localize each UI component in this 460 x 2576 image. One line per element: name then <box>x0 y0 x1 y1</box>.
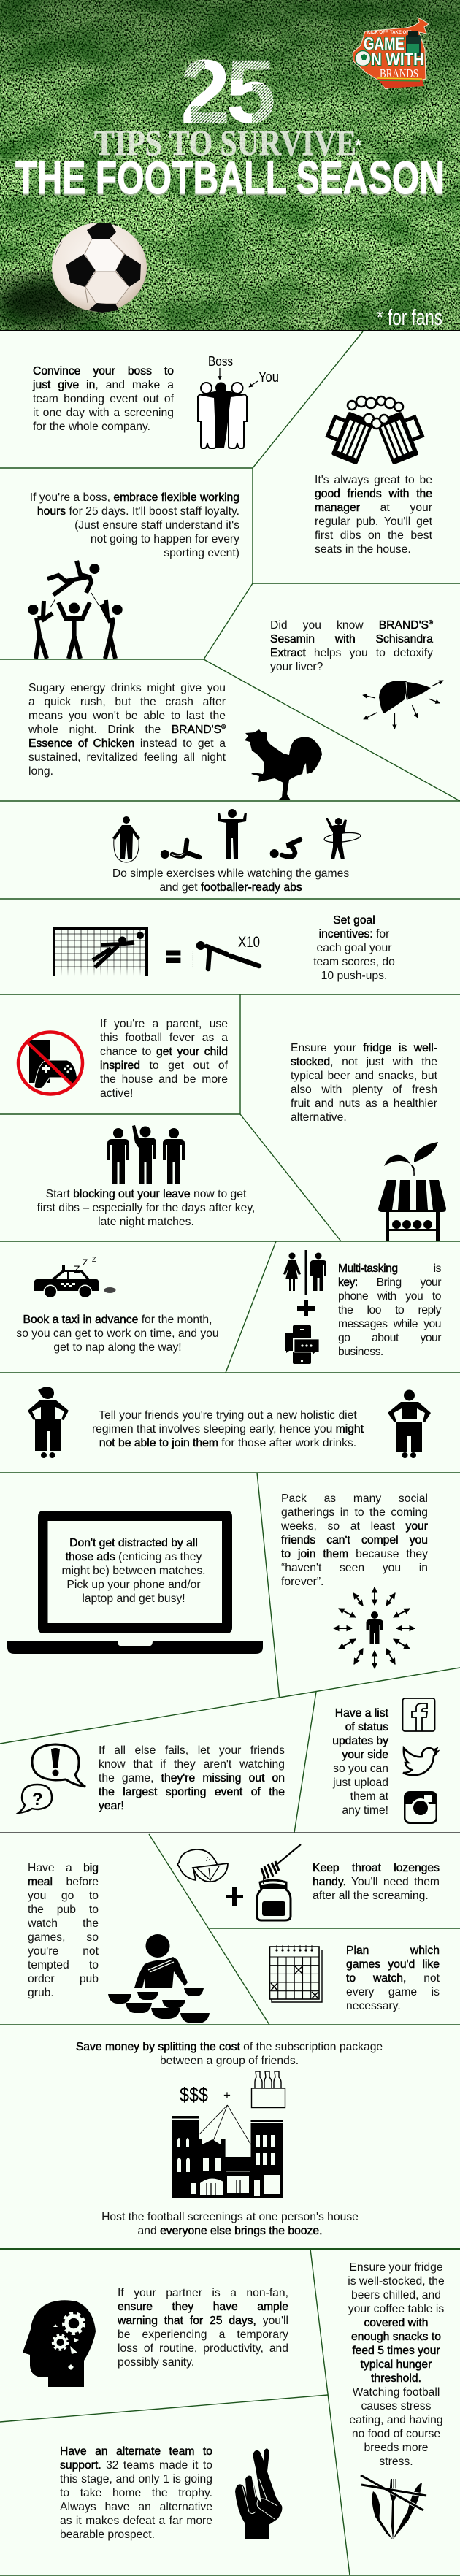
tip: book a taxi: get to nap along the way! <box>53 1341 182 1354</box>
tip: big meal: watch the <box>28 1917 99 1930</box>
tip: ignore ads: those ads (enticing as they <box>66 1551 202 1563</box>
tip: status updates: so you can <box>333 1763 388 1775</box>
tip: essence of chicken: sustained, revitalized feeling all night <box>28 751 226 764</box>
logo: game on with brands: KICK OFF. TAKE OFF. <box>367 31 413 35</box>
tip: throat lozenges: after all the screaming. <box>313 1890 429 1902</box>
tip: snacks on coffee table: typical hunger <box>361 2358 432 2371</box>
tip: goal incentives: incentives: for <box>319 928 389 940</box>
tip: warn your partner <box>117 2287 288 2369</box>
icon: boss and you figures <box>198 354 279 448</box>
tip: big meal <box>28 1862 99 1999</box>
tip: simple exercises: Do simple exercises while watching the games <box>112 867 349 880</box>
tip: well-stocked fridge: Ensure your fridge is well- <box>291 1042 437 1054</box>
tip: simple exercises <box>112 867 349 894</box>
tip: alternate team: support. 32 teams made it to <box>60 2459 212 2472</box>
tip: social gatherings: to join them because they <box>281 1548 428 1560</box>
tip: plan games <box>346 1944 440 2012</box>
logo: game on with brands: BRANDS <box>380 66 418 80</box>
tip: host screenings: Host the football screenings at one person's house <box>101 2211 359 2223</box>
tip: ignore ads <box>61 1537 206 1605</box>
tip: inspire your child: chance to get your child <box>100 1046 228 1058</box>
tip: convince your boss: for the whole company. <box>33 421 150 433</box>
tip: essence of chicken: a quick rush, but the crash after <box>28 696 226 708</box>
tips to survive: TIPS TO SURVIVE <box>94 122 356 163</box>
tip: goal incentives: each goal your <box>317 942 391 954</box>
tip: plan games: games you'd like <box>346 1958 440 1971</box>
tip: flexible working hours: hours for 25 days. It'll boost staff loyalty. <box>37 505 239 518</box>
tip: essence of chicken <box>28 682 226 778</box>
tip: warn your partner: warning that for 25 days, you'll <box>118 2315 288 2327</box>
tip: status updates: updates by <box>332 1735 388 1747</box>
tip: inspire your child: this football fever as a <box>100 1032 228 1044</box>
tip: convince your boss: just give in, and make a <box>33 379 174 391</box>
tip: goal incentives: 10 push-ups. <box>321 970 387 982</box>
tip: well-stocked fridge: alternative. <box>291 1111 347 1124</box>
tip: split subscription: Save money by splitting the cost of the subscription package <box>76 2041 383 2053</box>
tip: alternate team: Always have an alternative <box>60 2501 212 2513</box>
tip: big meal: Have a big <box>28 1862 99 1874</box>
logo: game on with brands <box>353 18 429 89</box>
icon: beer mugs <box>321 396 429 465</box>
tip: goal incentives: team scores, do <box>313 956 395 968</box>
tip: holistic diet: Tell your friends you're trying out a new holistic diet <box>99 1409 357 1422</box>
icon: taxi with zzz: Z <box>74 1263 80 1275</box>
tip: throat lozenges <box>313 1862 440 1902</box>
tip: inspire your child: inspired to get out of <box>100 1059 228 1072</box>
icon: woman hands on hips <box>28 1387 69 1458</box>
icon: man hands on hips <box>388 1390 431 1458</box>
icon: three men one raising hand <box>107 1125 185 1184</box>
icon: neighbourhood houses <box>172 2105 283 2198</box>
tip: missing out <box>98 1744 285 1812</box>
icon: rooster <box>245 729 322 800</box>
tip: friends with manager: regular pub. You'll get <box>315 515 432 528</box>
tip: book a taxi: Book a taxi in advance for the month, <box>23 1314 212 1326</box>
tip: essence of chicken: Essence of Chicken instead to get a <box>28 737 226 750</box>
tip: social gatherings <box>281 1492 428 1588</box>
icon: fruit stall <box>378 1142 446 1241</box>
tip: inspire your child <box>100 1018 228 1100</box>
tip: status updates: Have a list <box>335 1707 388 1720</box>
tip: alternate team: this stage, and only 1 is going <box>60 2473 212 2485</box>
icon: speech bubbles: ? <box>32 1790 43 1809</box>
tip: ignore ads: laptop and get busy! <box>82 1592 185 1605</box>
tip: ignore ads: Don't get distracted by all <box>69 1537 198 1549</box>
tip: multi-tasking: phone with you to <box>338 1290 441 1303</box>
tip: snacks on coffee table: Watching football <box>353 2386 440 2399</box>
tip: split subscription <box>76 2041 383 2067</box>
tip: multi-tasking: Multi-tasking is <box>338 1262 441 1275</box>
tip: friends with manager <box>315 474 432 556</box>
tip: social gatherings: “haven't seen you in <box>281 1562 428 1574</box>
number 25: 25 <box>180 42 273 142</box>
tip: well-stocked fridge: typical beer and snacks, but <box>291 1070 437 1082</box>
tip: ignore ads: Pick up your phone and/or <box>66 1579 201 1591</box>
tip: plan games: necessary. <box>346 2000 401 2012</box>
football <box>52 223 147 313</box>
tip: social gatherings: friends can't compel you <box>281 1534 428 1546</box>
exercise: sit-up <box>161 840 199 859</box>
tip: ignore ads: might be) between matches. <box>61 1565 206 1577</box>
tip: snacks on coffee table: is well-stocked, the <box>348 2275 445 2288</box>
tip: alternate team: as it makes defeat a far more <box>60 2515 212 2527</box>
tip: block out leave <box>37 1188 255 1228</box>
tip: multi-tasking: go about your <box>338 1332 441 1344</box>
tip: friends with manager: first dibs on the best <box>315 529 432 542</box>
exercise: standing man <box>218 809 247 859</box>
tip: snacks on coffee table: covered with <box>364 2317 429 2329</box>
tip: snacks on coffee table: threshold. <box>371 2372 421 2385</box>
tip: flexible working hours <box>30 491 239 559</box>
icon: taxi with zzz: Z <box>92 1256 96 1263</box>
tip: holistic diet: regimen that involves sleeping early, hence you might <box>92 1423 364 1435</box>
tip: big meal: you're not <box>28 1945 99 1958</box>
tip: alternate team: Have an alternate team to <box>60 2445 212 2458</box>
tip: well-stocked fridge: fruit and nuts as a healthier <box>291 1097 437 1110</box>
tip: status updates: your side <box>342 1749 388 1761</box>
icon: goal equals push-ups: X10 <box>238 934 260 951</box>
tip: sesamin detox: Did you know BRAND'S® <box>270 619 433 632</box>
tip: convince your boss: Convince your boss to <box>33 365 174 377</box>
tip: snacks on coffee table: enough snacks to <box>351 2331 441 2343</box>
icon: twitter <box>403 1748 437 1775</box>
tip: multi-tasking: messages while you <box>338 1318 441 1330</box>
tip: snacks on coffee table: causes stress <box>361 2400 431 2412</box>
tip: multi-tasking <box>338 1262 441 1358</box>
tip: essence of chicken: long. <box>28 765 53 778</box>
tip: status updates: them at <box>350 1790 388 1803</box>
tip: missing out: year! <box>99 1800 124 1812</box>
tip: social gatherings: gatherings in to the coming <box>281 1506 428 1519</box>
tip: snacks on coffee table: eating, and having <box>349 2414 443 2426</box>
tip: well-stocked fridge: also with plenty of fresh <box>291 1084 437 1096</box>
ball shadow <box>0 276 96 326</box>
icon: goal equals push-ups <box>54 929 260 976</box>
tip: throat lozenges: handy. You'll need them <box>313 1876 440 1888</box>
grass texture <box>0 0 460 330</box>
logo: game on with brands: GAME <box>364 34 405 54</box>
tip: snacks on coffee table: beers chilled, and <box>351 2289 441 2301</box>
icon: no food cutlery <box>361 2475 426 2539</box>
tip: host screenings: and everyone else brings the booze. <box>138 2225 322 2237</box>
tip: sesamin detox: your liver? <box>270 661 323 673</box>
icon: liver with arrows <box>363 681 443 729</box>
tip: host screenings <box>101 2211 359 2237</box>
icon: calendar <box>270 1945 322 2002</box>
icon: money plus beer crate: $$$ <box>180 2084 208 2106</box>
icon: no video games <box>18 1032 83 1094</box>
tip: snacks on coffee table: Ensure your fridge <box>349 2261 443 2274</box>
tip: multi-tasking: business. <box>338 1346 383 1358</box>
icon: person eating bowls <box>108 1934 210 2023</box>
tip: essence of chicken: means you won't be able to last the <box>28 710 226 722</box>
tip: convince your boss: it one day with a screening <box>33 407 174 419</box>
tip: flexible working hours: sporting event) <box>164 547 239 559</box>
tip: split subscription: between a group of friends. <box>160 2055 299 2067</box>
tip: inspire your child: active! <box>100 1087 133 1100</box>
tip: friends with manager: good friends with the <box>315 488 432 500</box>
tip: warn your partner: If your partner is a non-fan, <box>118 2287 288 2299</box>
icon: team throwing boss <box>28 561 123 659</box>
tip: missing out: If all else fails, let your friends <box>99 1744 285 1757</box>
tip: missing out: the largest sporting event of the <box>99 1786 285 1798</box>
exercise: jump rope <box>112 816 140 862</box>
tip: block out leave: Start blocking out your leave now to get <box>46 1188 246 1200</box>
tip: big meal: the pub to <box>28 1904 99 1916</box>
tip: social gatherings: forever”. <box>281 1576 323 1588</box>
exercise: crunch <box>270 840 300 858</box>
hero bottom rule <box>0 330 460 331</box>
tip: convince your boss: team bonding event out of <box>33 393 174 405</box>
tips to survive: * <box>355 136 362 156</box>
tip: social gatherings: Pack as many social <box>281 1492 428 1505</box>
tip: sesamin detox: Sesamin with Schisandra <box>270 633 433 645</box>
exercise: hula hoop <box>324 818 361 859</box>
icon: speech bubbles <box>18 1744 85 1813</box>
tip: big meal: order pub <box>28 1973 99 1985</box>
tip: sesamin detox <box>270 619 434 673</box>
tip: flexible working hours: (Just ensure staff understand it's <box>74 519 239 532</box>
tip: sesamin detox: Extract helps you to detoxify <box>270 647 433 659</box>
icon: facebook <box>403 1698 435 1731</box>
icon: money plus beer crate: + <box>223 2088 231 2102</box>
tip: well-stocked fridge: stocked, not just with the <box>291 1056 437 1068</box>
icon: restroom signs and phone <box>283 1250 326 1364</box>
tip: book a taxi: so you can get to work on time, and you <box>16 1327 219 1340</box>
tip: social gatherings: weeks, so at least your <box>281 1520 428 1533</box>
tip: snacks on coffee table <box>348 2261 445 2468</box>
icon: taxi with zzz <box>34 1256 115 1298</box>
tip: flexible working hours: not going to happen for every <box>91 533 239 545</box>
tip: plan games: every game is <box>346 1986 440 1998</box>
tip: warn your partner: loss of routine, productivity, and <box>118 2342 288 2355</box>
tip: alternate team: to take home the trophy. <box>60 2487 212 2499</box>
icon: plus sign <box>226 1887 243 1906</box>
grass patches <box>0 0 460 330</box>
icon: head with gears <box>23 2300 96 2387</box>
tip: big meal: tempted to <box>28 1959 99 1971</box>
tip: friends with manager: manager at your <box>315 502 432 514</box>
tip: multi-tasking: key: Bring your <box>338 1276 441 1289</box>
icon: laptop <box>7 1511 263 1654</box>
tip: simple exercises: and get footballer-ready abs <box>159 881 302 894</box>
tip: snacks on coffee table: breeds more <box>364 2442 429 2454</box>
tip: warn your partner: ensure they have ample <box>118 2301 288 2313</box>
tip: big meal: grub. <box>28 1987 54 1999</box>
icon: lemon <box>177 1849 228 1882</box>
icon: person with arrows <box>334 1587 415 1668</box>
tip: goal incentives <box>313 914 395 982</box>
tip: essence of chicken: whole night. Drink the BRAND'S® <box>28 724 226 736</box>
tip: status updates: just upload <box>333 1776 388 1789</box>
tip: snacks on coffee table: stress. <box>379 2456 413 2468</box>
tip: warn your partner: possibly sanity. <box>118 2356 194 2369</box>
tip: status updates: of status <box>345 1721 388 1733</box>
tip: plan games: Plan which <box>346 1944 440 1957</box>
tip: holistic diet: not be able to join them for those after work drinks. <box>99 1437 356 1449</box>
icon: boss and you figures: Boss <box>208 354 233 369</box>
icon: instagram <box>404 1791 437 1824</box>
tip: block out leave: first dibs – especially for the days after key, <box>37 1202 255 1214</box>
icon: honey jar <box>257 1844 301 1920</box>
tip: inspire your child: the house and be more <box>100 1073 228 1086</box>
tip: throat lozenges: Keep throat lozenges <box>313 1862 440 1874</box>
tip: essence of chicken: Sugary energy drinks might give you <box>28 682 226 694</box>
tip: well-stocked fridge <box>291 1042 437 1124</box>
tip: missing out: the game, they're missing out on <box>99 1772 285 1785</box>
tip: book a taxi <box>16 1314 219 1354</box>
icon: crossed fingers <box>235 2448 282 2539</box>
hero: grass header <box>0 0 460 331</box>
tip: inspire your child: If you're a parent, use <box>100 1018 228 1030</box>
tip: convince your boss <box>32 365 174 433</box>
tip: friends with manager: It's always great to be <box>315 474 432 486</box>
tip: block out leave: late night matches. <box>98 1216 194 1228</box>
tip: snacks on coffee table: no food of course <box>352 2428 440 2440</box>
icon: taxi with zzz: Z <box>83 1257 88 1268</box>
tip: status updates: any time! <box>342 1804 388 1817</box>
tip: flexible working hours: If you're a boss, embrace flexible working <box>30 491 239 504</box>
tip: goal incentives: Set goal <box>333 914 375 927</box>
logo: game on with brands: N WITH <box>371 50 424 69</box>
tip: friends with manager: seats in the house. <box>315 543 411 556</box>
icon: money plus beer crate <box>180 2071 285 2107</box>
tip: big meal: you go to <box>28 1890 99 1902</box>
tip: status updates <box>332 1707 388 1817</box>
icon: boss and you figures: You <box>258 369 279 386</box>
tip: alternate team: bearable prospect. <box>60 2529 155 2541</box>
tip: warn your partner: be experiencing a temporary <box>118 2328 288 2341</box>
tip: big meal: games, so <box>28 1931 99 1944</box>
tip: missing out: know that if they aren't watching <box>99 1758 285 1771</box>
grass shading <box>0 0 460 330</box>
tip: multi-tasking: the loo to reply <box>338 1304 441 1316</box>
tip: big meal: meal before <box>28 1876 99 1888</box>
tip: holistic diet <box>92 1409 364 1449</box>
tip: snacks on coffee table: your coffee table is <box>348 2303 444 2315</box>
tip: alternate team <box>60 2445 212 2541</box>
tip: snacks on coffee table: feed 5 times your <box>352 2345 440 2357</box>
tip: plan games: to watch, not <box>346 1972 440 1985</box>
icons: exercises row <box>112 809 361 862</box>
